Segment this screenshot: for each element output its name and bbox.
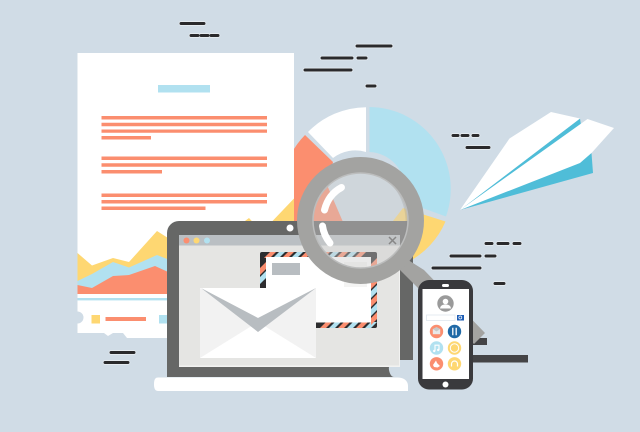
dark bar beside phone bbox=[470, 355, 528, 362]
document title bar bbox=[158, 85, 210, 92]
illustration bbox=[78, 21, 614, 391]
speaker bbox=[442, 284, 449, 287]
lens highlights bbox=[322, 188, 342, 243]
icon: music app bbox=[430, 341, 443, 355]
donut chart bbox=[281, 107, 451, 262]
plane left wing bbox=[460, 112, 580, 210]
chart axis line bbox=[78, 298, 178, 300]
laptop camera bbox=[286, 224, 294, 232]
segment: yellow bbox=[389, 208, 446, 262]
handle shadow bbox=[473, 338, 487, 345]
laptop base bbox=[154, 378, 408, 391]
magnifying glass bbox=[305, 165, 487, 345]
document page bbox=[78, 53, 294, 338]
laptop bbox=[154, 221, 413, 391]
icon: headphones app bbox=[448, 357, 461, 370]
handle bbox=[400, 258, 485, 344]
icon: mail app bbox=[430, 325, 443, 338]
segment: orange bbox=[281, 135, 343, 222]
airmail stripes top and bottom bbox=[264, 252, 366, 258]
area chart bbox=[78, 198, 294, 294]
paragraph two bbox=[102, 156, 267, 174]
icon: search button bbox=[457, 315, 464, 320]
paper sheet bbox=[78, 53, 294, 338]
icon: like app bbox=[430, 357, 443, 370]
window dots bbox=[184, 238, 210, 244]
envelope flap bbox=[201, 288, 316, 332]
laptop body bbox=[167, 221, 413, 377]
lens glass bbox=[312, 172, 408, 268]
plane fold bbox=[460, 118, 581, 210]
dashes: top left bbox=[181, 24, 218, 36]
airmail envelope bbox=[260, 252, 377, 328]
dashes: near paper plane bbox=[453, 136, 489, 148]
segment: blue bbox=[370, 107, 451, 216]
screen inner bbox=[179, 235, 399, 366]
icon: profile avatar bbox=[437, 295, 454, 312]
plane right wing bbox=[460, 119, 614, 210]
dashes: right of magnifier bbox=[433, 244, 520, 284]
paper plane bbox=[460, 112, 614, 210]
search field bbox=[426, 315, 455, 320]
airmail stripes sides bbox=[260, 258, 377, 325]
legend bbox=[92, 315, 169, 324]
icon: columns app bbox=[448, 325, 461, 338]
stamp bbox=[344, 262, 367, 287]
dashes: top centre bbox=[305, 46, 391, 86]
smartphone bbox=[418, 280, 473, 390]
segment: white bbox=[308, 107, 366, 158]
home button bbox=[442, 382, 448, 388]
dashes: lower left bbox=[105, 352, 134, 362]
address label bbox=[272, 263, 300, 275]
paragraph three bbox=[102, 194, 267, 210]
icon: close window bbox=[389, 237, 396, 244]
icon: target app bbox=[448, 341, 461, 355]
phone body bbox=[418, 280, 473, 390]
screen bbox=[179, 235, 400, 367]
phone screen bbox=[422, 289, 469, 379]
window title bar bbox=[179, 235, 400, 246]
paragraph one bbox=[102, 116, 267, 140]
front envelope bbox=[200, 288, 316, 358]
lens ring bbox=[305, 165, 416, 276]
plane underside bbox=[460, 153, 593, 210]
